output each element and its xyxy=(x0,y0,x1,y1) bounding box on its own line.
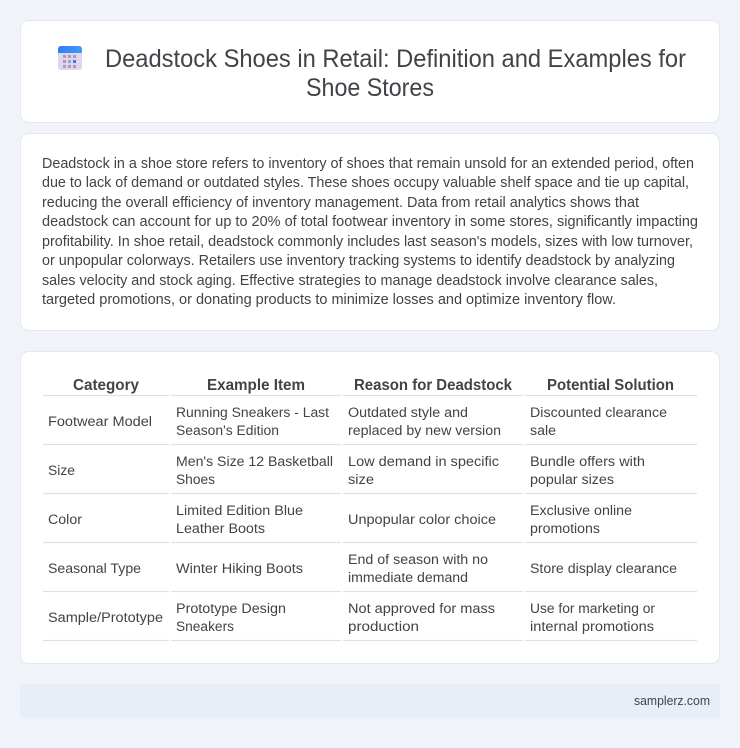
text block: description paragraph: targeted promotions, or donating products to minimize losses and optimize inventory flow. xyxy=(42,292,616,308)
table header: Potential Solution xyxy=(547,377,674,394)
row: sample/prototype: Not approved for mass xyxy=(348,601,495,617)
row: sample/prototype: Sneakers xyxy=(176,619,234,635)
table header: Category xyxy=(73,377,139,394)
row: size: Men's Size 12 Basketball xyxy=(176,454,333,470)
row: footwear model: Season's Edition xyxy=(176,423,279,439)
row: size: Shoes xyxy=(176,472,215,488)
row: seasonal type: End of season with no xyxy=(348,552,488,568)
row: footwear model: Outdated style and xyxy=(348,405,468,421)
row: size: popular sizes xyxy=(530,472,614,488)
row: sample/prototype: Sample/Prototype xyxy=(48,610,163,626)
row: size: Bundle offers with xyxy=(530,454,645,470)
row: seasonal type: Winter Hiking Boots xyxy=(176,561,303,577)
title xyxy=(105,45,686,102)
table header xyxy=(73,377,674,394)
row: footwear model: Running Sneakers - Last xyxy=(176,405,329,421)
row: size xyxy=(48,454,645,488)
row: sample/prototype: Use for marketing or xyxy=(530,601,655,617)
row: color: promotions xyxy=(530,521,600,537)
table xyxy=(43,377,697,640)
row: color: Limited Edition Blue xyxy=(176,503,303,519)
row: footwear model xyxy=(48,405,667,439)
row: color: Leather Boots xyxy=(176,521,265,537)
row: seasonal type xyxy=(48,552,677,586)
text block: description paragraph: Deadstock in a shoe store refers to inventory of shoes that remain unsold for an extended period, often xyxy=(42,156,694,172)
footer text: samplerz.com xyxy=(634,694,710,708)
row: color: Unpopular color choice xyxy=(348,512,496,528)
row: size: size xyxy=(348,472,374,488)
text block: description paragraph: profitability. In shoe retail, deadstock commonly includes last season's models, sizes with low turnover, xyxy=(42,234,693,250)
row: sample/prototype: production xyxy=(348,619,419,635)
row: seasonal type: Seasonal Type xyxy=(48,561,141,577)
row: color xyxy=(48,503,632,537)
row: sample/prototype: Prototype Design xyxy=(176,601,286,617)
table header: Reason for Deadstock xyxy=(354,377,512,394)
panel: table card xyxy=(20,352,720,664)
title: Deadstock Shoes in Retail: Definition and Examples for xyxy=(105,45,686,73)
text block: description paragraph: deadstock can account for up to 20% of total footwear inventory in some stores, significantly impacting xyxy=(42,214,698,230)
row: size: Low demand in specific xyxy=(348,454,499,470)
row: color: Exclusive online xyxy=(530,503,632,519)
text block: description paragraph: due to lack of demand or outdated styles. These shoes occupy valuable shelf space and tie up capital, xyxy=(42,175,689,191)
row: footwear model: replaced by new version xyxy=(348,423,501,439)
text block: description paragraph: reducing the overall efficiency of inventory management. Data from retail analytics shows that xyxy=(42,195,639,211)
row: seasonal type: immediate demand xyxy=(348,570,468,586)
row: seasonal type: Store display clearance xyxy=(530,561,677,577)
row: color: Color xyxy=(48,512,82,528)
title: Shoe Stores xyxy=(306,74,434,102)
row: sample/prototype xyxy=(48,601,655,635)
text block: description paragraph xyxy=(42,156,698,308)
row: footwear model: Discounted clearance xyxy=(530,405,667,421)
row: sample/prototype: internal promotions xyxy=(530,619,654,635)
panel: description xyxy=(20,134,720,330)
icon: calendar xyxy=(58,46,82,70)
text block: description paragraph: sales velocity and stock aging. Effective strategies to manage deadstock involve clearance sales, xyxy=(42,273,658,289)
footer bar xyxy=(20,684,720,718)
row: footwear model: sale xyxy=(530,423,556,439)
row: footwear model: Footwear Model xyxy=(48,414,152,430)
text block: description paragraph: or unpopular colorways. Retailers use inventory tracking systems to identify deadstock by analyzing xyxy=(42,253,675,269)
row: size: Size xyxy=(48,463,75,479)
table header: Example Item xyxy=(207,377,305,394)
panel: title card xyxy=(20,20,720,122)
